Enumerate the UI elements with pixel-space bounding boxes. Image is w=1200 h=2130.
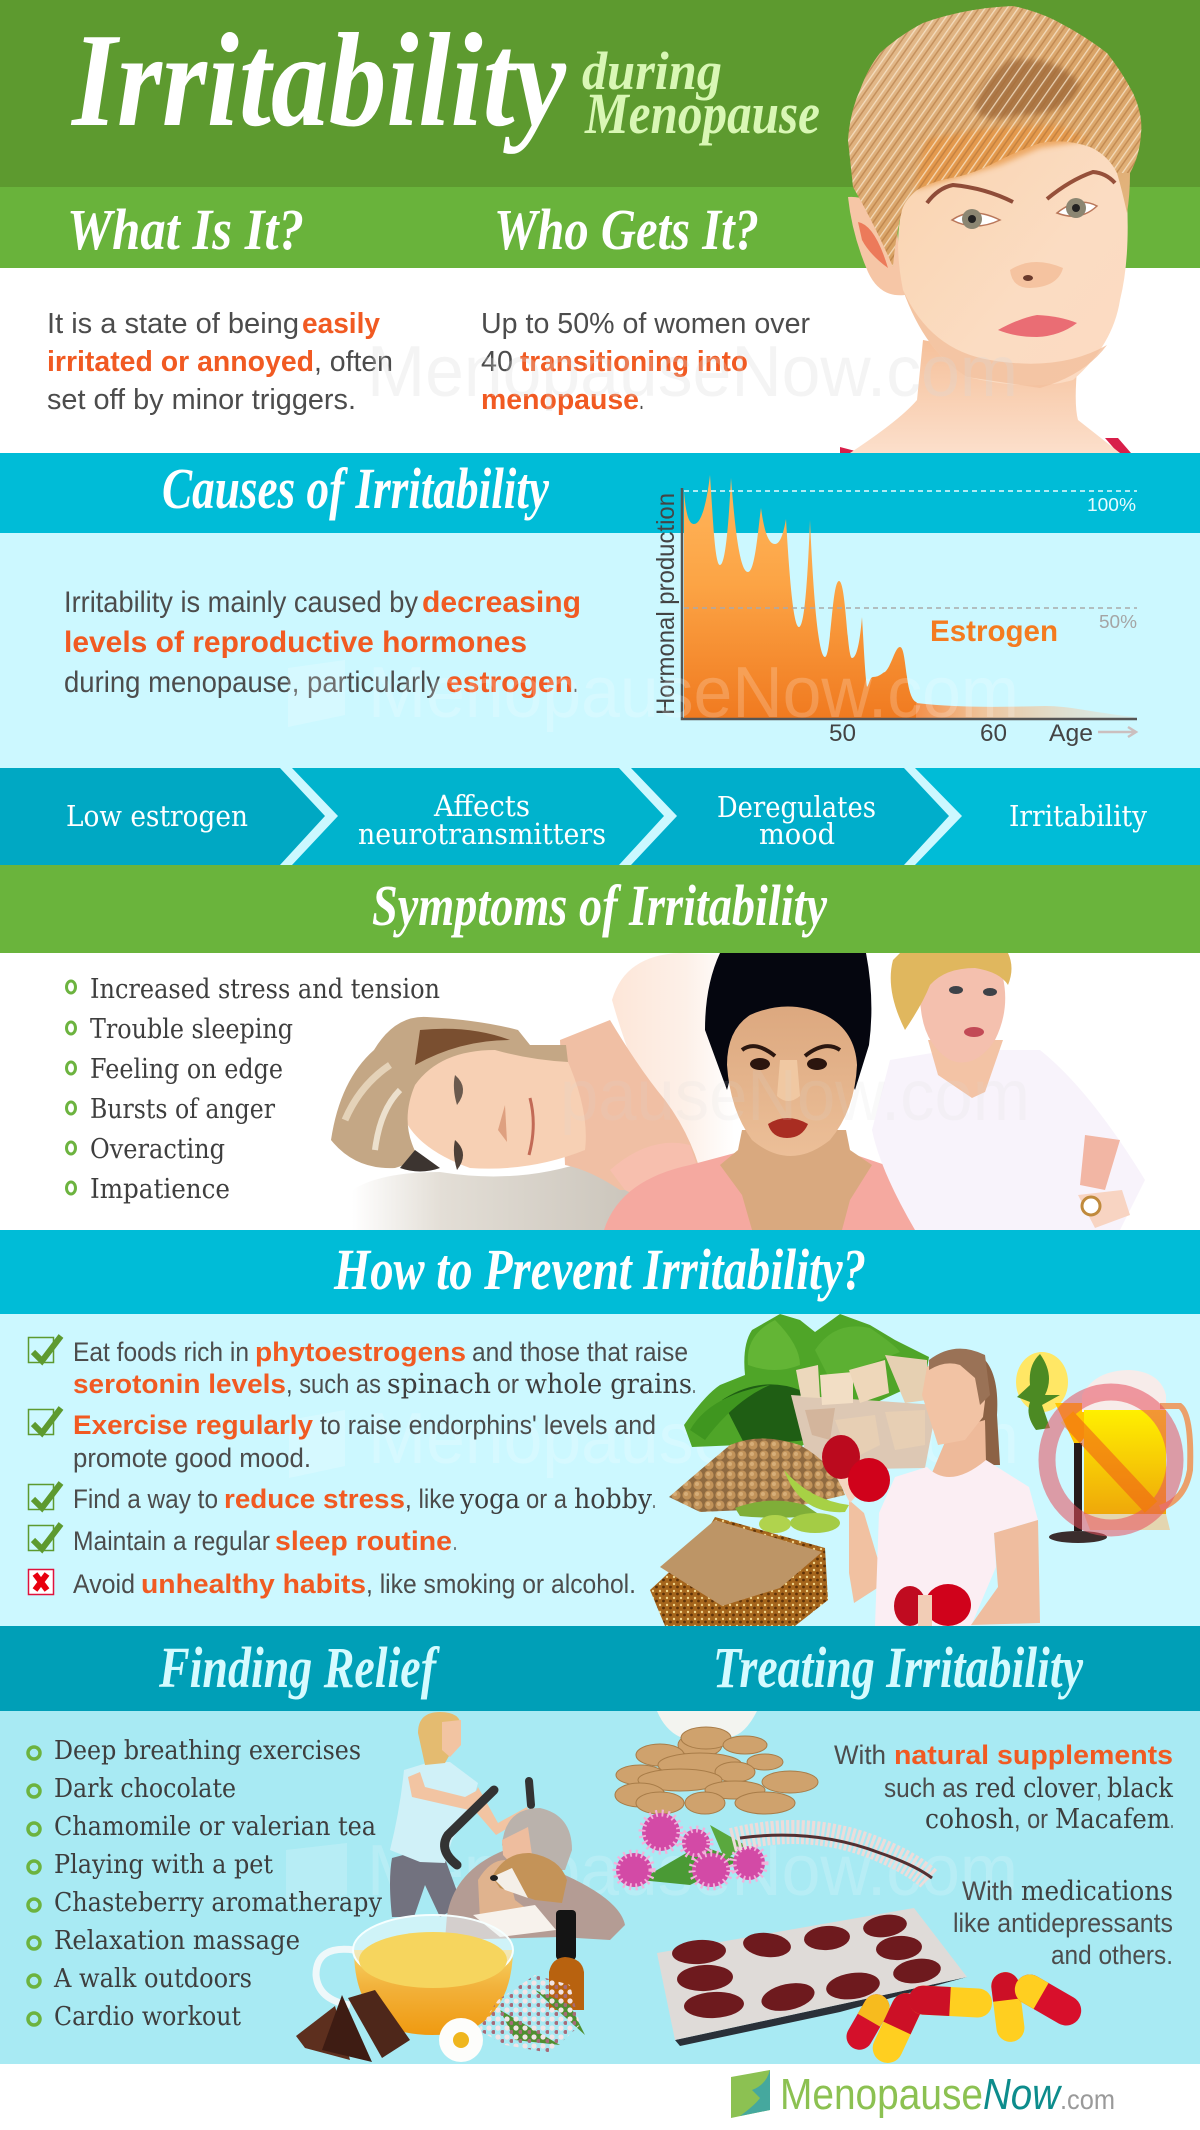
axis ticks: 60 bbox=[980, 720, 1007, 747]
title: Menopause bbox=[584, 81, 820, 146]
hair shading bbox=[848, 6, 1141, 267]
text: what is it: irritated or annoyed bbox=[47, 346, 314, 378]
text: who gets it bbox=[481, 308, 810, 416]
axis ticks: 50 bbox=[829, 720, 856, 747]
photo: blister pack bbox=[657, 1908, 967, 2046]
tip: avoid: , like smoking or alcohol. bbox=[366, 1569, 636, 1599]
text: causes explanation: Irritability is mainly caused by bbox=[64, 586, 418, 619]
logo wordmark bbox=[780, 2070, 1115, 2119]
tip: exercise: promote good mood. bbox=[73, 1443, 311, 1473]
icons: checkmarks bbox=[28, 1336, 61, 1550]
heading: prevention: How to Prevent Irritability? bbox=[333, 1237, 866, 1302]
text: causes explanation bbox=[64, 586, 581, 699]
step: affects neurotransmitters bbox=[358, 789, 606, 851]
watermark: MenopauseNow.com bbox=[368, 1399, 1019, 1479]
tip: sleep: Maintain a regular bbox=[73, 1526, 270, 1556]
list: finding relief: Chasteberry aromatherapy bbox=[54, 1888, 382, 1918]
title: during bbox=[582, 41, 722, 101]
photo: tea cup bbox=[316, 1915, 513, 2035]
title: Irritability bbox=[70, 6, 566, 154]
tip: foods: or bbox=[497, 1369, 519, 1399]
tip: sleep bbox=[73, 1526, 457, 1556]
text: medications: like antidepressants bbox=[953, 1908, 1173, 1938]
chart tail bbox=[916, 703, 1134, 718]
photo: essential oil bottle bbox=[549, 1910, 584, 2010]
photo: woman with dumbbells bbox=[822, 1349, 1040, 1626]
text: what is it: It is a state of being bbox=[47, 308, 299, 340]
text: causes explanation: estrogen bbox=[446, 666, 573, 699]
list: finding relief: Deep breathing exercises bbox=[54, 1736, 361, 1766]
heading: symptoms: Symptoms of Irritability bbox=[372, 873, 827, 938]
watermark: MenopauseNow.com bbox=[368, 653, 1019, 733]
text: what is it bbox=[47, 308, 393, 416]
photo: black cohosh bbox=[732, 1832, 932, 1880]
tip: avoid: Avoid bbox=[73, 1569, 135, 1599]
text: who gets it: . bbox=[639, 384, 644, 416]
logo wordmark: .com bbox=[1060, 2084, 1115, 2115]
text: natural supplements: Macafem bbox=[1055, 1804, 1170, 1835]
text: natural supplements: natural supplements bbox=[894, 1740, 1173, 1770]
text: what is it: easily bbox=[302, 308, 380, 340]
photo: red clover bbox=[616, 1813, 765, 1887]
list: symptoms: Increased stress and tension bbox=[90, 974, 440, 1005]
photo: woman lying on pillow bbox=[331, 953, 735, 1230]
tip: stress: or a bbox=[526, 1484, 568, 1514]
text: natural supplements: cohosh bbox=[925, 1804, 1014, 1835]
photo: chickpeas bbox=[669, 1438, 845, 1512]
tip: sleep: . bbox=[453, 1526, 457, 1556]
step: irritability: Irritability bbox=[1009, 799, 1148, 833]
photo: woman on elliptical bbox=[390, 1712, 531, 1917]
tip: foods: spinach bbox=[387, 1369, 491, 1400]
axis ticks bbox=[829, 720, 1093, 747]
tip: stress: yoga bbox=[459, 1484, 520, 1515]
text: who gets it: Up to 50% of women over bbox=[481, 308, 810, 340]
photo: herbal tablets bbox=[615, 1711, 818, 1814]
text: causes explanation: . bbox=[573, 666, 578, 699]
text: causes explanation: during menopause, particularly bbox=[64, 666, 440, 699]
text: natural supplements: such as bbox=[884, 1773, 968, 1803]
tip: foods: Eat foods rich in bbox=[73, 1337, 249, 1367]
step: deregulates mood: Deregulates bbox=[717, 790, 876, 824]
tip: avoid bbox=[73, 1569, 636, 1599]
text: natural supplements: , bbox=[1097, 1773, 1101, 1803]
text: natural supplements: red clover bbox=[975, 1773, 1097, 1804]
tip: stress: , like bbox=[405, 1484, 455, 1514]
axis ticks: Age bbox=[1049, 720, 1093, 747]
label: 100 percent: 100% bbox=[1087, 495, 1136, 515]
tip: avoid: unhealthy habits bbox=[141, 1569, 366, 1599]
cocktail glass bbox=[1016, 1352, 1113, 1543]
list: prevention tips bbox=[28, 1336, 696, 1599]
list: finding relief: Dark chocolate bbox=[54, 1774, 236, 1804]
tip: exercise: to raise endorphins' levels and bbox=[320, 1410, 656, 1440]
text: natural supplements: , or bbox=[1014, 1804, 1048, 1834]
photo: frowning woman bbox=[604, 953, 968, 1230]
text: causes explanation: decreasing bbox=[422, 586, 581, 619]
axis label: hormonal production: Hormonal production bbox=[652, 493, 680, 715]
step: affects neurotransmitters: Affects bbox=[433, 789, 530, 823]
text: what is it: set off by minor triggers. bbox=[47, 384, 356, 416]
heading: causes: Causes of Irritability bbox=[162, 456, 549, 521]
photo: edamame bbox=[735, 1470, 849, 1533]
tip: stress: reduce stress bbox=[224, 1484, 405, 1514]
photo: tofu bowl bbox=[791, 1355, 937, 1470]
logo wordmark: Now bbox=[983, 2070, 1063, 2119]
photo: whole grain bread bbox=[650, 1517, 828, 1626]
photo: irritated woman portrait bbox=[840, 6, 1141, 453]
list: finding relief: Relaxation massage bbox=[54, 1926, 300, 1956]
heading: what is it: What Is It? bbox=[67, 197, 304, 262]
label: estrogen: Estrogen bbox=[930, 615, 1058, 648]
chart: estrogen decline bbox=[652, 475, 1137, 747]
list: finding relief: Playing with a pet bbox=[54, 1850, 273, 1880]
tip: foods: phytoestrogens bbox=[255, 1337, 466, 1367]
list: symptoms: Trouble sleeping bbox=[90, 1014, 293, 1045]
list: symptoms: Impatience bbox=[90, 1174, 230, 1205]
tip: stress bbox=[73, 1484, 656, 1515]
list: symptoms: Feeling on edge bbox=[90, 1054, 283, 1085]
tip: foods: , such as bbox=[286, 1369, 381, 1399]
watermark: pauseNow.com bbox=[560, 1056, 1030, 1136]
photo: older woman with dog bbox=[445, 1808, 625, 1940]
tip: foods bbox=[73, 1337, 696, 1400]
logo: MenopauseNow bbox=[731, 2070, 1115, 2119]
list: finding relief: A walk outdoors bbox=[53, 1964, 252, 1994]
heading: who gets it: Who Gets It? bbox=[494, 197, 759, 262]
list: finding relief: Cardio workout bbox=[54, 2002, 241, 2032]
no sign bbox=[1047, 1392, 1175, 1528]
tip: stress: . bbox=[652, 1484, 656, 1514]
icon: red cross bbox=[28, 1570, 54, 1594]
tip: exercise: Exercise regularly bbox=[73, 1410, 313, 1440]
tip: stress: Find a way to bbox=[73, 1484, 218, 1514]
watermark: MenopauseNow.com bbox=[367, 332, 1018, 412]
label: 50 percent: 50% bbox=[1099, 612, 1137, 632]
text: medications bbox=[953, 1876, 1173, 1970]
photo: cocktail and beer crossed out bbox=[1016, 1352, 1190, 1543]
photo: chocolate bbox=[296, 1990, 410, 2062]
flow: arrow steps bbox=[0, 768, 1200, 865]
heading: finding relief: Finding Relief bbox=[158, 1635, 440, 1700]
beer mug bbox=[1082, 1370, 1190, 1530]
list: symptoms: Bursts of anger bbox=[90, 1094, 275, 1125]
photo: herbs and daisy bbox=[439, 1975, 585, 2062]
list: finding relief: Chamomile or valerian tea bbox=[54, 1812, 376, 1842]
text: who gets it: 40 bbox=[481, 346, 513, 378]
photo: spinach bbox=[684, 1314, 929, 1447]
list: symptoms: Overacting bbox=[90, 1134, 225, 1165]
logo wordmark: Menopause bbox=[780, 2070, 983, 2119]
text: natural supplements: black bbox=[1107, 1773, 1174, 1804]
heading: treating irritability: Treating Irritability bbox=[713, 1635, 1083, 1700]
text: who gets it: menopause bbox=[481, 384, 639, 416]
axes bbox=[682, 488, 1137, 719]
photo: capsules bbox=[842, 1969, 1087, 2068]
tip: foods: whole grains bbox=[525, 1369, 692, 1400]
photo: woman with crossed arms bbox=[872, 953, 1145, 1230]
tip: foods: and those that raise bbox=[472, 1337, 688, 1367]
step: deregulates mood bbox=[717, 790, 876, 851]
list: finding relief bbox=[28, 1736, 382, 2032]
tip: foods: . bbox=[692, 1369, 696, 1399]
reference lines bbox=[684, 490, 1137, 492]
chart area: estrogen curve bbox=[684, 475, 935, 718]
step: affects neurotransmitters: neurotransmitters bbox=[358, 817, 606, 851]
tip: stress: hobby bbox=[574, 1484, 653, 1515]
arrow: age direction bbox=[1098, 727, 1136, 737]
text: natural supplements bbox=[834, 1740, 1174, 1835]
text: natural supplements: With bbox=[834, 1740, 886, 1770]
step: deregulates mood: mood bbox=[759, 817, 835, 851]
text: what is it: , often bbox=[314, 346, 393, 378]
text: medications: medications bbox=[1021, 1876, 1173, 1907]
text: medications: and others. bbox=[1051, 1940, 1173, 1970]
step: low estrogen: Low estrogen bbox=[66, 799, 248, 833]
text: medications: With bbox=[962, 1876, 1013, 1906]
tip: sleep: sleep routine bbox=[275, 1526, 452, 1556]
list: symptoms bbox=[66, 974, 440, 1205]
text: who gets it: transitioning into bbox=[520, 346, 748, 378]
watermark: MenopauseNow.com bbox=[367, 1831, 1018, 1911]
tip: exercise bbox=[73, 1410, 656, 1473]
text: natural supplements: . bbox=[1170, 1804, 1174, 1834]
text: causes explanation: levels of reproductive hormones bbox=[64, 626, 527, 659]
tip: foods: serotonin levels bbox=[73, 1369, 286, 1399]
logo icon bbox=[731, 2070, 770, 2118]
